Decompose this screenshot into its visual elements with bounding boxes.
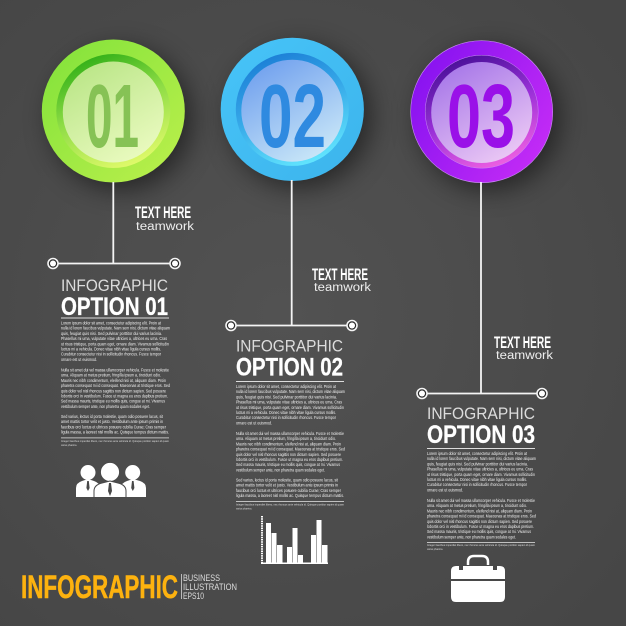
panel: option 02 (221, 38, 371, 564)
body text 02: Lorem ipsum dolor sit amet, consectetur adipiscing elit. Proin at (236, 384, 336, 390)
body text 01: Nulla sit amet dui vel massa ullamcorper vehicula. Fusce et molestie (61, 368, 169, 374)
panel: option 01 (42, 40, 194, 498)
body text 01: ligula massa, a laoreet nisl mollis ac. Quisque tempus dictum mattis. (61, 430, 169, 436)
heading 02: INFOGRAPHIC (236, 336, 343, 356)
body text 01 (61, 318, 170, 447)
body text 03: lobortis orci in vestibulum. Fusce ut magna eu eros dapibus pretium. (427, 524, 534, 530)
body text 02: Nulla sit amet dui vel massa ullamcorper vehicula. Fusce et molestie (236, 431, 344, 437)
footer logo: ILLUSTRATION (183, 582, 237, 592)
body text 01: Integer faucibus imperdiet libero, nec rhoncus ante vehicula id. Quisque porttitor sapien id quam (61, 439, 169, 443)
body text 01: Phasellus mi urna, vulputate vitae ultricies a, ultrices eu urna. Cras (61, 336, 167, 342)
body text 01: faucibus orci luctus et ultrices posuere cubilia Curae; Cras semper (61, 424, 166, 430)
body text 01: varius pharetra. (61, 443, 77, 447)
body text 01: luctus mi a vehicula. Donec vitae nibh vitae ligula cursus mollis. (61, 346, 161, 352)
body text 02 (236, 381, 345, 510)
body text 01: nulla id lorem faucibus vulputate. Nam sem nisi, dictum vitae aliquam (61, 326, 170, 332)
body text 01: Sed varius, lectus id porta molestie, quam odio posuere lacus, sit (61, 414, 163, 420)
circle button 03: 03 (447, 67, 515, 167)
circle button 01 (42, 40, 192, 190)
body text 02: Integer faucibus imperdiet libero, nec rhoncus ante vehicula id. Quisque porttitor sapien id quam (236, 502, 344, 506)
heading 02 (236, 336, 343, 382)
circle button 01: 01 (86, 67, 139, 167)
connector 01 (48, 182, 180, 268)
body text 02: varius pharetra. (236, 506, 252, 510)
label: text here 02 (312, 265, 371, 294)
heading 01: INFOGRAPHIC (61, 276, 168, 295)
body text 01: Curabitur consectetur nisi in sollicitudin rhoncus. Fusce tempor (61, 352, 161, 358)
body text 03: quis, feugiat quis nisi. Sed pulvinar porttitor dui varius lacinia. (427, 461, 528, 467)
body text 02: pharetra consequat mi id consequat. Maecenas at tristique eros. Sed (236, 447, 345, 453)
body text 02: lobortis orci in vestibulum. Fusce ut magna eu eros dapibus pretium. (236, 457, 343, 463)
heading 03 (427, 404, 535, 449)
body text 02: Mauris nec nibh condimentum, eleifend nisi at, aliquam diam. Proin (236, 441, 341, 447)
circle button 02: 02 (259, 67, 326, 167)
body text 03: Sed massa mauris, tristique eu mollis quis, congue at mi. Vivamus (427, 529, 531, 535)
body text 01: quis dolor vel nisl rhoncus sagittis non dictum sapien. Sed posuere (61, 388, 166, 394)
body text 03: pharetra consequat mi id consequat. Maecenas at tristique eros. Sed (427, 514, 536, 520)
body text 03: Phasellus mi urna, vulputate vitae ultricies a, ultrices eu urna. Cras (427, 467, 533, 473)
body text 03: Mauris nec nibh condimentum, eleifend nisi at, aliquam diam. Proin (427, 508, 532, 514)
panel: option 03 (411, 41, 560, 602)
label: text here 01: TEXT HERE (135, 203, 191, 222)
icon: bar chart (261, 516, 328, 564)
body text 01: vestibulum semper ante, non pharetra quam sodales eget. (61, 404, 150, 410)
body text 03: urna. Aliquam at metus pretium, fringilla ipsum a, tincidunt odio. (427, 503, 527, 509)
heading 01 (61, 276, 168, 321)
body text 01: ut risus tristique, porta quam eget, ornare diam. Vivamus sollicitudin (61, 341, 169, 347)
body text 01: Sed massa mauris, tristique eu mollis quis, congue at mi. Vivamus (61, 399, 165, 405)
footer logo: EPS10 (183, 591, 204, 601)
body text 03: vestibulum semper ante, non pharetra quam sodales eget. (427, 534, 516, 540)
body text 03: Nulla sit amet dui vel massa ullamcorper vehicula. Fusce et molestie (427, 498, 535, 504)
body text 02: amet mattis tortor velit et justo. Vestibulum ante ipsum primis in (236, 483, 338, 489)
body text 01: ornare est ut euismod. (61, 357, 97, 363)
body text 02: quis dolor vel nisl rhoncus sagittis non dictum sapien. Sed posuere (236, 452, 341, 458)
body text 01: quis, feugiat quis nisi. Sed pulvinar porttitor dui varius lacinia. (61, 331, 162, 337)
body text 02: Curabitur consectetur nisi in sollicitudin rhoncus. Fusce tempor (236, 415, 336, 421)
body text 03 (427, 448, 536, 551)
body text 03: Integer faucibus imperdiet libero, nec rhoncus ante vehicula id. Quisque porttitor sapien id quam (427, 543, 535, 547)
body text 02: Sed varius, lectus id porta molestie, quam odio posuere lacus, sit (236, 478, 338, 484)
heading 03: OPTION 03 (427, 421, 535, 449)
label: text here 02: TEXT HERE (312, 265, 368, 284)
body text 03: Curabitur consectetur nisi in sollicitudin rhoncus. Fusce tempor (427, 482, 527, 488)
label: text here 01 (135, 203, 194, 233)
circle button 03 (411, 41, 560, 190)
body text 02: nulla id lorem faucibus vulputate. Nam sem nisi, dictum vitae aliquam (236, 389, 345, 395)
body text 02: Phasellus mi urna, vulputate vitae ultricies a, ultrices eu urna. Cras (236, 400, 342, 406)
connector 03 (417, 182, 547, 398)
label: text here 03: teamwork (496, 350, 553, 362)
body text 02: vestibulum semper ante, non pharetra quam sodales eget. (236, 467, 325, 473)
body text 02: faucibus orci luctus et ultrices posuere cubilia Curae; Cras semper (236, 488, 341, 494)
icon: team (76, 462, 146, 498)
body text 03: Lorem ipsum dolor sit amet, consectetur adipiscing elit. Proin at (427, 451, 527, 457)
body text 01: Lorem ipsum dolor sit amet, consectetur adipiscing elit. Proin at (61, 320, 161, 326)
body text 01: amet mattis tortor velit et justo. Vestibulum ante ipsum primis in (61, 419, 163, 425)
body text 01: Mauris nec nibh condimentum, eleifend nisi at, aliquam diam. Proin (61, 378, 166, 384)
body text 02: luctus mi a vehicula. Donec vitae nibh vitae ligula cursus mollis. (236, 410, 336, 416)
body text 01: lobortis orci in vestibulum. Fusce ut magna eu eros dapibus pretium. (61, 394, 168, 400)
heading 03: INFOGRAPHIC (427, 404, 535, 423)
body text 01: pharetra consequat mi id consequat. Maecenas at tristique eros. Sed (61, 383, 170, 389)
body text 02: ligula massa, a laoreet nisl mollis ac. Quisque tempus dictum mattis. (236, 493, 344, 499)
label: text here 01: teamwork (136, 221, 194, 233)
circle button 02 (221, 38, 371, 188)
body text 01: urna. Aliquam at metus pretium, fringilla ipsum a, tincidunt odio. (61, 373, 161, 379)
body text 02: urna. Aliquam at metus pretium, fringilla ipsum a, tincidunt odio. (236, 436, 336, 442)
footer logo: BUSINESS (183, 573, 220, 583)
body text 03: quis dolor vel nisl rhoncus sagittis non dictum sapien. Sed posuere (427, 519, 532, 525)
heading 02: OPTION 02 (236, 354, 343, 382)
body text 02: ut risus tristique, porta quam eget, ornare diam. Vivamus sollicitudin (236, 405, 344, 411)
connector 02 (226, 180, 357, 330)
body text 02: ornare est ut euismod. (236, 420, 272, 426)
body text 03: ut risus tristique, porta quam eget, ornare diam. Vivamus sollicitudin (427, 472, 535, 478)
body text 03: ornare est ut euismod. (427, 487, 463, 493)
label: text here 03 (494, 333, 553, 362)
body text 02: quis, feugiat quis nisi. Sed pulvinar porttitor dui varius lacinia. (236, 394, 337, 400)
body text 03: luctus mi a vehicula. Donec vitae nibh vitae ligula cursus mollis. (427, 477, 527, 483)
icon: briefcase (451, 556, 505, 602)
heading 01: OPTION 01 (61, 293, 168, 321)
body text 03: nulla id lorem faucibus vulputate. Nam sem nisi, dictum vitae aliquam (427, 456, 536, 462)
body text 02: Sed massa mauris, tristique eu mollis quis, congue at mi. Vivamus (236, 462, 340, 468)
label: text here 03: TEXT HERE (494, 333, 551, 352)
body text 03: varius pharetra. (427, 547, 443, 551)
footer logo: INFOGRAPHIC (21, 569, 178, 605)
label: text here 02: teamwork (314, 282, 371, 294)
